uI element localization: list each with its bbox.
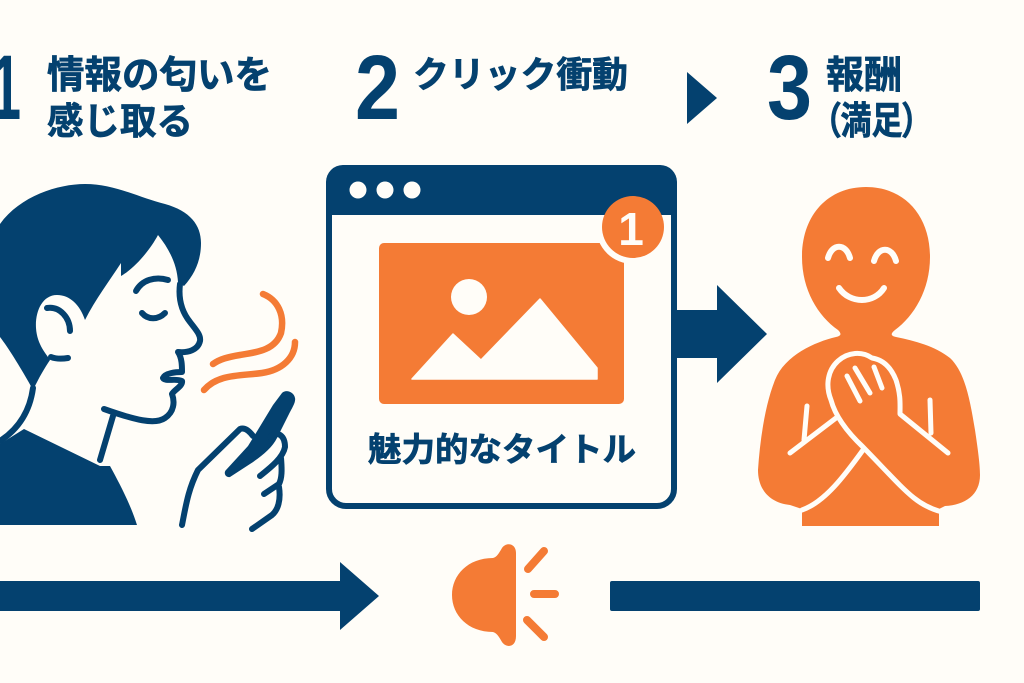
crossed arms and hands [790,353,948,512]
fingers [847,367,882,401]
bar [610,581,980,611]
icon: smiling person [758,187,980,526]
window title bar [326,165,677,215]
phone [225,391,295,477]
panel: browser window [326,165,677,506]
icon: notification bell [452,544,555,646]
step 3 heading: 報酬 [826,55,902,97]
shirt [0,429,137,525]
hand [182,429,285,529]
notification badge: 1 [618,203,644,255]
neck lines [0,388,113,460]
icon: person sniffing with phone [0,184,295,529]
image sun [451,279,487,315]
long arrow [0,562,379,630]
window dots [350,182,420,198]
eyebrow and eye [136,278,168,318]
step 3 heading: 3 [767,37,812,139]
image placeholder [379,243,624,404]
step 2 heading [355,37,628,139]
step 2 heading: クリック衝動 [413,54,628,95]
image mountains [412,299,597,379]
scent waves [204,294,295,390]
step 1 heading: 感じ取る [47,101,193,142]
face [828,247,896,300]
step 2 heading: 2 [355,37,400,139]
step 3 heading: （満足） [825,101,918,143]
step 3 heading [767,37,918,143]
hair [0,184,201,390]
arrow: step 2 to step 3 [687,72,717,124]
face outline [104,284,200,421]
ear [47,308,70,359]
step 1 heading: 情報の匂いを [47,55,272,97]
body [758,187,980,526]
step 1 heading [0,37,272,142]
notification badge [600,196,664,263]
arrow: window to person [677,285,767,383]
window title text: 魅力的なタイトル [368,431,636,468]
